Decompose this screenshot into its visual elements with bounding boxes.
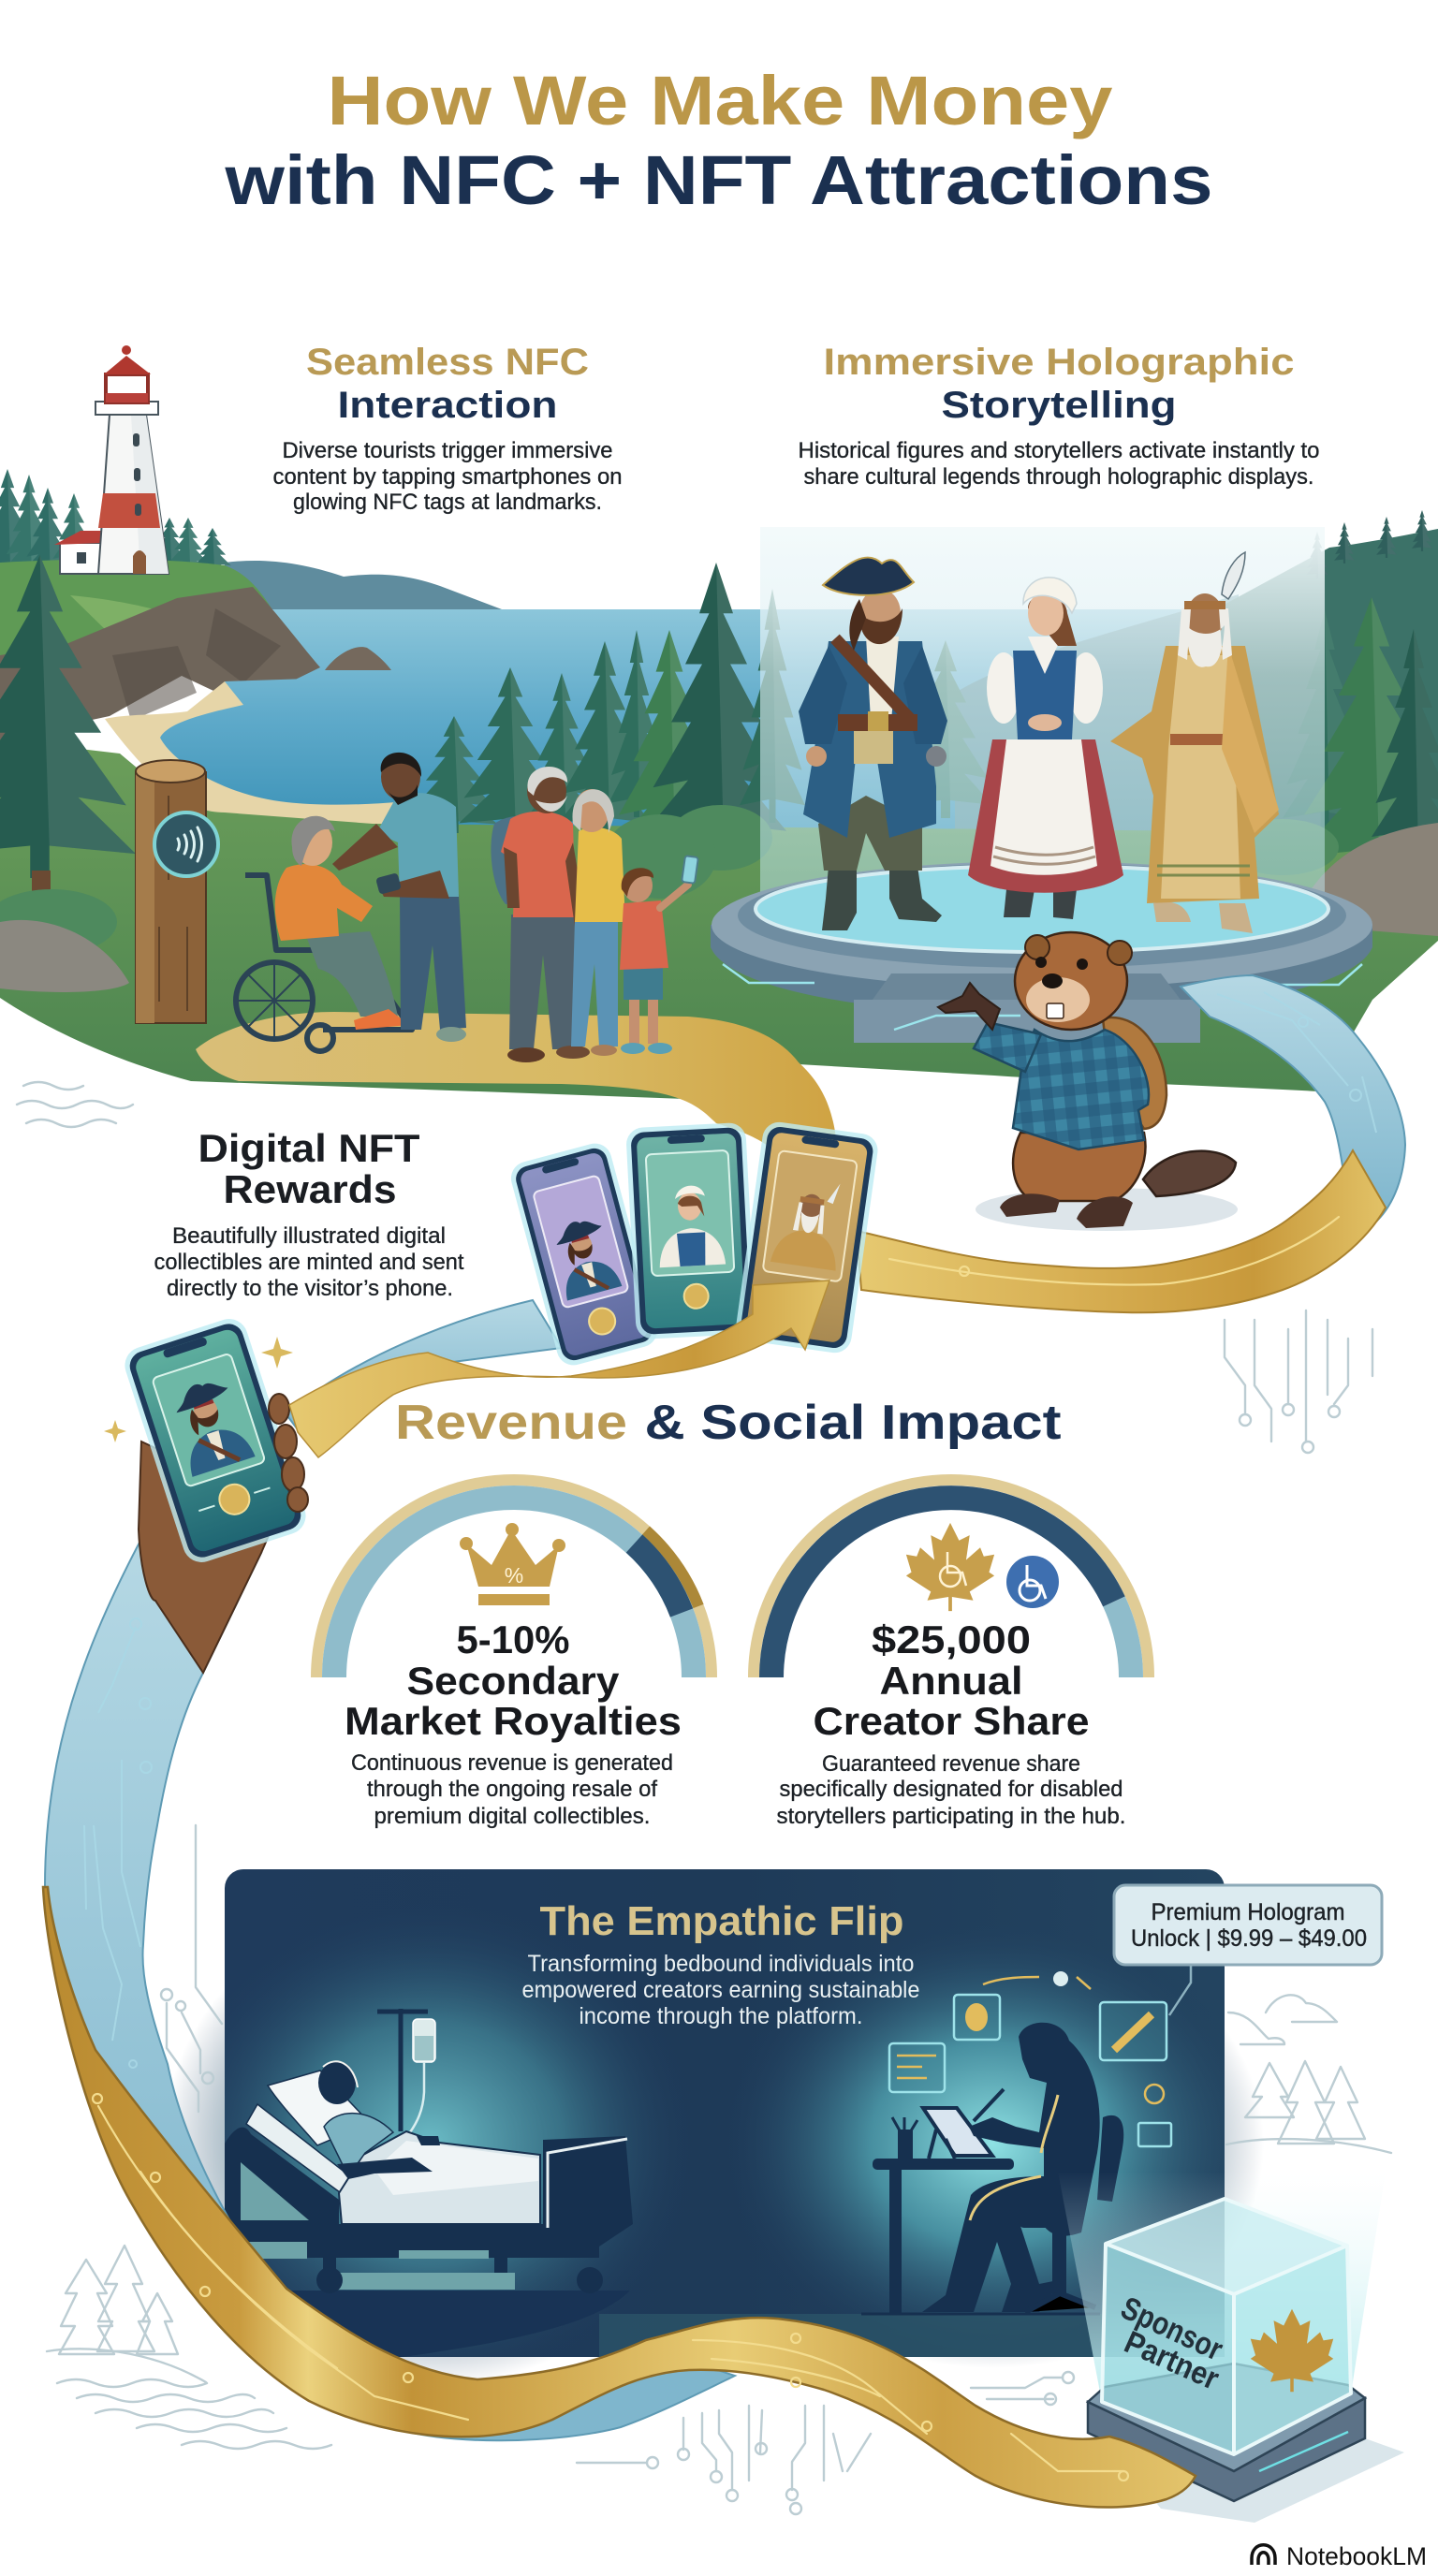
hologram projection box	[760, 527, 1325, 898]
left blue ribbon	[45, 1539, 309, 2378]
stat value and label: Creator Share	[813, 1699, 1090, 1743]
text block: seamless NFC interaction: Seamless NFC	[306, 342, 589, 383]
wheelchair user	[236, 816, 412, 1051]
decorative line art: circuit left of panel	[161, 1825, 222, 2112]
gold arrow swoosh to phones	[289, 1281, 829, 1457]
stat value and label: Annual	[880, 1659, 1022, 1703]
distant hills	[225, 561, 502, 618]
older man	[491, 767, 590, 1062]
text block: digital NFT rewards	[154, 1126, 464, 1301]
tourists group	[236, 753, 698, 1062]
far hills right	[955, 594, 1239, 842]
ground	[0, 739, 1438, 1100]
callout: premium hologram price: Premium Hologram	[1152, 1899, 1344, 1925]
decorative line art: waves upper left	[17, 1082, 133, 1127]
heading: revenue and social impact: & Social Impact	[644, 1396, 1062, 1450]
icon: maple leaf with wheelchair	[906, 1523, 994, 1611]
phone: elder card	[734, 1120, 880, 1354]
decorative line art: clouds and trees right	[1226, 1995, 1391, 2153]
text: empathic flip description: empowered creators earning sustainable	[522, 1977, 919, 2003]
trees behind lighthouse	[0, 469, 233, 578]
text block: digital NFT rewards: Digital NFT	[198, 1126, 420, 1170]
stat description	[777, 1751, 1125, 1829]
heading: The Empathic Flip: The Empathic Flip	[539, 1898, 904, 1944]
text block: digital NFT rewards: directly to the visitor’s phone.	[167, 1276, 453, 1301]
title: with NFC + NFT Attractions	[224, 141, 1213, 219]
bushes	[0, 805, 1339, 955]
maple leaf on cube	[1251, 2309, 1333, 2392]
NFT phone cards	[507, 1120, 880, 1368]
NotebookLM logo: NotebookLM	[1286, 2542, 1427, 2570]
stat value and label: Secondary	[406, 1659, 620, 1703]
text block: digital NFT rewards: collectibles are minted and sent	[154, 1250, 464, 1275]
character: Indigenous elder hologram	[1110, 552, 1279, 933]
stat description: Guaranteed revenue share	[822, 1751, 1080, 1777]
text block: digital NFT rewards: Beautifully illustrated digital	[172, 1223, 446, 1249]
icon: lighthouse	[54, 345, 169, 574]
text: empathic flip description: Transforming bedbound individuals into	[528, 1951, 914, 1977]
forested right hill	[1217, 510, 1438, 852]
child	[620, 856, 698, 1054]
gold ribbon lower sweep	[43, 1887, 1196, 2508]
stat description: specifically designated for disabled	[779, 1777, 1123, 1802]
stat value and label: $25,000	[872, 1617, 1031, 1661]
illustration: creator at desk	[861, 2023, 1123, 2314]
decorative line art: circuit right	[1225, 1310, 1372, 1453]
character: beaver mascot	[938, 932, 1238, 1231]
text: empathic flip description: income through the platform.	[579, 2003, 863, 2029]
sand path	[196, 1012, 837, 1179]
stat description: through the ongoing resale of	[367, 1777, 657, 1802]
gauge arc	[316, 1480, 712, 1677]
callout: premium hologram price: Unlock | $9.99 – $49.00	[1131, 1925, 1367, 1952]
decorative line art: trees bottom left	[47, 2246, 206, 2382]
text block: immersive holographic storytelling: Storytelling	[942, 385, 1176, 426]
foreground and mid trees	[0, 555, 1438, 917]
character: settler woman hologram	[968, 578, 1123, 919]
icon: sponsor partner glass cube	[1058, 2172, 1404, 2523]
partner text: Partner	[1119, 2324, 1225, 2397]
icon: hand	[139, 1442, 281, 1673]
hand holding phone	[120, 1314, 311, 1673]
beach and bay	[105, 681, 393, 833]
circuit lines on gold ribbon	[889, 1217, 1339, 1285]
gold ribbon right	[857, 1150, 1386, 1312]
stat value and label: 5-10%	[457, 1617, 569, 1661]
stat description: Continuous revenue is generated	[351, 1750, 673, 1776]
hill and cliff	[0, 560, 391, 749]
circuit lines on left ribbon	[84, 1618, 152, 2068]
heading: revenue and social impact	[395, 1396, 1062, 1450]
text block: immersive holographic storytelling: share cultural legends through holographic displays.	[803, 464, 1314, 490]
icon: crown with percent: %	[505, 1563, 523, 1588]
text block: seamless NFC interaction	[273, 342, 622, 515]
icon: fingers	[269, 1394, 308, 1512]
callout: premium hologram price	[1114, 1885, 1382, 2015]
character: pirate hologram	[799, 558, 947, 930]
title: How We Make Money	[328, 62, 1112, 139]
blue ribbon behind phones	[286, 1300, 562, 1432]
title	[224, 62, 1213, 219]
panel: the empathic flip	[163, 1869, 1264, 2387]
icon: phone with pirate NFT	[120, 1314, 311, 1567]
text: empathic flip description	[522, 1951, 919, 2029]
floating creative icons	[889, 1971, 1171, 2146]
sea	[225, 609, 1438, 834]
stat: annual creator share	[754, 1480, 1149, 1829]
stat description: storytellers participating in the hub.	[777, 1804, 1125, 1829]
sponsor text: Sponsor	[1116, 2291, 1228, 2368]
text block: immersive holographic storytelling	[798, 342, 1320, 490]
lower blue ribbon	[384, 2349, 735, 2440]
boulders	[0, 823, 1438, 992]
stat value and label: Market Royalties	[345, 1699, 682, 1743]
text block: seamless NFC interaction: glowing NFC tags at landmarks.	[293, 490, 602, 515]
phone: pirate card	[507, 1140, 661, 1368]
stat description: premium digital collectibles.	[374, 1804, 650, 1829]
decorative line art: circuit bottom	[577, 2372, 1074, 2514]
text block: seamless NFC interaction: content by tapping smartphones on	[273, 464, 622, 490]
decorative line art: waves	[57, 2379, 331, 2449]
helper man	[332, 753, 466, 1042]
heading: revenue and social impact: Revenue	[395, 1396, 627, 1450]
icon: NFC wooden post	[136, 760, 218, 1023]
stat: secondary market royalties	[316, 1480, 712, 1829]
patient glow	[163, 1900, 697, 2387]
creator glow	[721, 1919, 1264, 2368]
sparkles	[104, 1337, 293, 1442]
stat description	[351, 1750, 673, 1829]
text block: immersive holographic storytelling: Historical figures and storytellers activate instantly to	[798, 438, 1320, 463]
blue data ribbon right	[1181, 975, 1405, 1221]
text block: immersive holographic storytelling: Immersive Holographic	[824, 342, 1294, 383]
circuit lines on gold sweep	[93, 2094, 1128, 2481]
stat value and label	[813, 1617, 1090, 1743]
stat value and label	[345, 1617, 682, 1743]
text block: seamless NFC interaction: Diverse tourists trigger immersive	[283, 438, 612, 463]
landscape scene	[0, 469, 1438, 1100]
icon: crown with percent	[460, 1523, 565, 1605]
holographic platform	[711, 861, 1372, 1043]
icon: accessibility badge	[1006, 1556, 1059, 1608]
gauge arc	[754, 1480, 1149, 1677]
illustration: patient in hospital bed	[225, 2009, 633, 2357]
circuit lines on blue ribbon	[1217, 992, 1376, 1133]
woman	[571, 789, 625, 1056]
phone: settler card	[625, 1122, 756, 1339]
text block: digital NFT rewards: Rewards	[223, 1167, 397, 1211]
text block: seamless NFC interaction: Interaction	[337, 385, 558, 426]
